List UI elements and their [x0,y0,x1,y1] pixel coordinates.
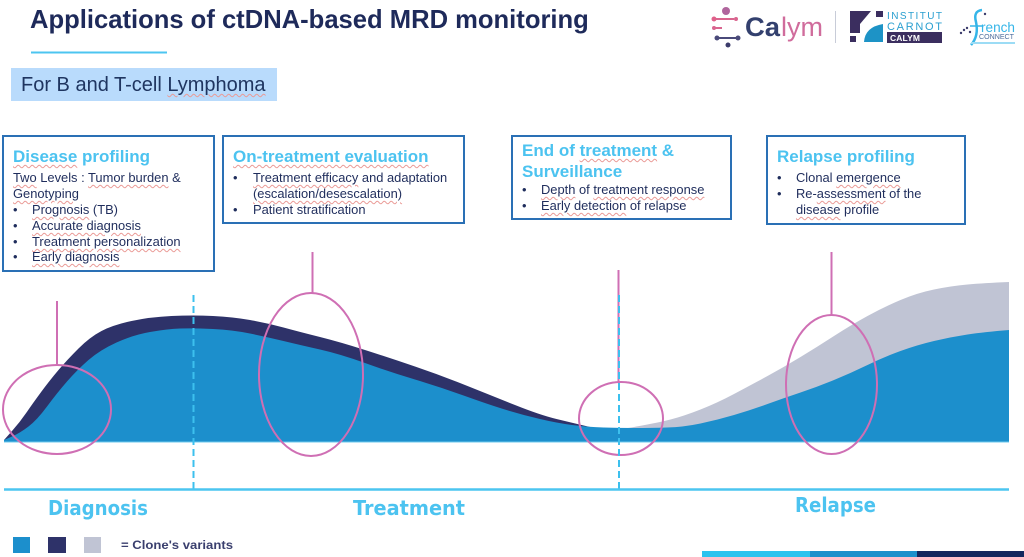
bullet: re-assessment [777,186,921,220]
text block: two levels [13,170,181,204]
phase label: Treatment: Treatment [353,496,465,520]
marker: treatment ellipse and stem [259,252,363,456]
bullet: early diagnosis [13,249,120,268]
panel: end of treatment and surveillance: Early detection of relapse [541,198,686,213]
area: dark navy clone [4,316,590,442]
panel: end of treatment and surveillance [511,135,732,220]
heading: end of treatment and surveillance: End of treatment & [522,141,674,160]
panel: disease profiling: Early diagnosis [32,249,119,264]
footer colour bar [702,551,1024,557]
heading: end of treatment and surveillance: Surveillance [522,162,622,181]
area: grey relapse clone [628,282,1009,442]
panel: end of treatment and surveillance: Depth of treatment response [541,182,704,197]
bullet: clonal emergence [777,170,901,188]
divider: diagnosis to treatment dashed line [192,295,194,489]
logo divider [835,11,836,43]
bullet: depth of response [522,182,704,200]
panel: on-treatment evaluation [222,135,465,224]
subtitle banner: For B and T-cell Lymphoma [21,74,266,96]
panel: disease profiling [2,135,215,272]
legend: clone variants: = Clone's variants [121,538,233,552]
logo: Institut Carnot Calym [850,11,942,43]
panel: relapse profiling: disease profile [796,202,879,217]
logo: French Connect: CONNECT [979,34,1015,41]
logo: Calym: Ca [745,12,781,42]
heading: end of treatment and surveillance [522,141,674,181]
text block: two levels: Two Levels : Tumor burden & [13,170,181,185]
bullet: early detection [522,198,686,216]
bullet: prognosis: • [13,202,18,217]
bullet: treatment efficacy [233,170,447,204]
panel: disease profiling: Accurate diagnosis [32,218,141,233]
bullet: re-assessment: • [777,186,782,201]
marker: diagnosis ellipse and stem [3,301,111,454]
bullet: clonal emergence: • [777,170,782,185]
panel: relapse profiling: Re-assessment of the [796,186,921,201]
subtitle banner [11,68,277,101]
legend: clone variants [13,537,233,553]
panel: relapse profiling: Clonal emergence [796,170,901,185]
text block: two levels: Genotyping [13,186,79,201]
panel: on-treatment evaluation: Treatment efficacy and adaptation [253,170,447,185]
bullet: prognosis [13,202,118,220]
heading: disease profiling: Disease profiling [13,147,150,166]
logo: Institut Carnot Calym: INSTITUT [887,11,942,22]
bullet: accurate diagnosis [13,218,141,236]
bullet: early diagnosis: • [13,249,18,264]
bullet: patient stratification: • [233,202,238,217]
logo: Calym [712,7,823,48]
heading: on-treatment evaluation: On-treatment evaluation [233,147,429,166]
panel: disease profiling: Treatment personalization [32,234,181,249]
logo: French Connect: rench [981,19,1015,35]
panel: disease profiling: Prognosis (TB) [32,202,118,217]
bullet: patient stratification [233,202,366,217]
title underline [31,52,167,54]
logo: Institut Carnot Calym: CALYM [890,33,920,43]
title: Applications of ctDNA-based MRD monitoring [30,6,589,34]
area: blue main clone [4,328,1009,442]
logo: Calym: lym [781,12,823,42]
timeline axis [4,488,1009,491]
bullet: treatment personalization: • [13,234,18,249]
panel: on-treatment evaluation: Patient stratification [253,202,366,217]
panel: relapse profiling [766,135,966,225]
logo: Institut Carnot Calym: CARNOT [887,21,942,33]
marker: end of treatment ellipse and stem [579,270,663,455]
marker: relapse ellipse and stem [786,252,877,454]
heading: relapse profiling: Relapse profiling [777,147,915,166]
panel: on-treatment evaluation: (escalation/desescalation) [253,186,402,201]
bullet: treatment personalization [13,234,181,252]
phase label: Relapse: Relapse [795,493,876,517]
bullet: depth of response: • [522,182,527,197]
bullet: treatment efficacy: • [233,170,238,185]
logo: French Connect [960,10,1015,45]
bullet: early detection: • [522,198,527,213]
divider: treatment to relapse dashed line [618,295,620,489]
bullet: accurate diagnosis: • [13,218,18,233]
phase label: Diagnosis: Diagnosis [48,496,148,520]
